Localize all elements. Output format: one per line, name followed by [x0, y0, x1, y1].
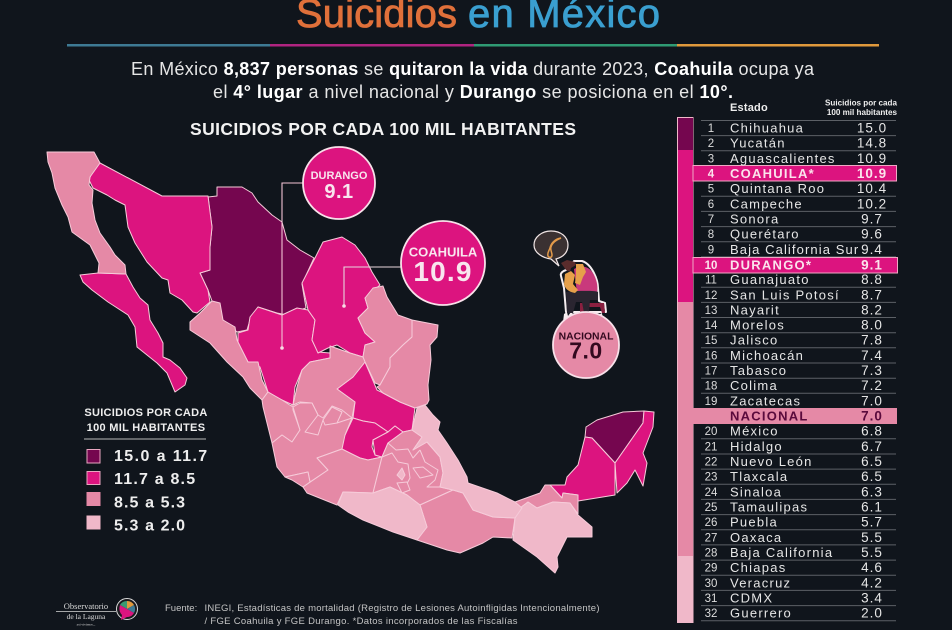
state names: Aguascalientes: [730, 151, 836, 166]
state names: Chiapas: [730, 560, 786, 575]
callout: Nacional: NACIONAL: [559, 332, 614, 342]
state names: DURANGO*: [730, 257, 812, 272]
rank numbers: 5: [708, 184, 714, 196]
legend title: SUICIDIOS POR CADA: [84, 407, 208, 419]
legend: [84, 407, 209, 534]
state names: [730, 120, 859, 621]
callout: Durango: 9.1: [324, 181, 354, 203]
source note: [165, 603, 600, 627]
values: 6.7: [861, 439, 883, 454]
state names: Nuevo León: [730, 454, 813, 469]
rank numbers: 12: [705, 290, 717, 302]
state names: San Luis Potosí: [730, 287, 840, 302]
state names: Chihuahua: [730, 120, 804, 136]
state names: Baja California Sur: [730, 242, 859, 257]
values: 7.0: [861, 408, 883, 424]
state names: México: [730, 424, 779, 439]
state names: Puebla: [730, 515, 778, 530]
leader line: Durango: [280, 183, 304, 350]
rank numbers: 20: [705, 426, 717, 438]
values: 3.4: [861, 590, 883, 606]
rank numbers: 23: [705, 472, 717, 484]
source note: Fuente:: [165, 603, 197, 614]
legend item: 5.3 a 2.0: 5.3 a 2.0: [114, 518, 186, 534]
table header: 100 mil habitantes: [827, 108, 897, 117]
icon: speech bubble with noose: [534, 231, 568, 266]
values: 6.5: [861, 454, 883, 469]
state names: Sinaloa: [730, 484, 782, 499]
values: 5.7: [861, 515, 883, 530]
icon: person with speech bubble: [534, 231, 606, 322]
rank numbers: 16: [705, 350, 717, 362]
state names: COAHUILA*: [730, 166, 815, 181]
values: 7.0: [861, 393, 883, 408]
state names: Guanajuato: [730, 272, 810, 287]
callout: Durango: DURANGO: [311, 170, 368, 182]
ranking table: [678, 98, 898, 622]
callout: Nacional: [553, 312, 619, 378]
rank numbers: 30: [705, 578, 717, 590]
values: 7.8: [861, 333, 883, 348]
rank numbers: 27: [705, 532, 717, 544]
map heading: SUICIDIOS POR CADA 100 MIL HABITANTES: [190, 119, 576, 139]
rank numbers: 31: [705, 593, 717, 605]
state names: Michoacán: [730, 348, 804, 363]
rank numbers: 2: [708, 138, 714, 150]
rank numbers: 1: [708, 123, 714, 135]
logo: Observatorio de la Laguna: así vivimos...: [77, 622, 95, 626]
values: 6.8: [861, 424, 883, 439]
choropleth map of Mexico: [47, 152, 654, 573]
rank numbers: [705, 123, 718, 620]
state names: Morelos: [730, 318, 785, 333]
highlight row: Nacional: [693, 408, 897, 424]
state names: Yucatán: [730, 136, 786, 151]
values: 15.0: [857, 120, 887, 136]
state names: Campeche: [730, 196, 803, 211]
values: 6.3: [861, 484, 883, 499]
rank numbers: 8: [708, 229, 714, 241]
values: 7.2: [861, 378, 883, 393]
values: 9.1: [861, 257, 883, 272]
state names: Baja California: [730, 545, 833, 560]
rank numbers: 18: [705, 381, 717, 393]
state names: Zacatecas: [730, 393, 801, 408]
state names: Oaxaca: [730, 530, 782, 545]
values: 9.7: [861, 212, 883, 226]
state names: NACIONAL: [730, 408, 809, 424]
values: 5.5: [861, 530, 883, 545]
legend item: 11.7 a 8.5: 11.7 a 8.5: [114, 471, 196, 488]
title divider: [67, 44, 879, 46]
rank numbers: 11: [705, 275, 717, 287]
state names: Veracruz: [730, 575, 791, 590]
rank numbers: 3: [708, 153, 714, 165]
values: 10.4: [857, 181, 887, 196]
state names: Quintana Roo: [730, 181, 825, 196]
intro text: En México 8,837 personas se quitaron la vida durante 2023, Coahuila ocupa ya: [131, 59, 815, 79]
legend item: 15.0 a 11.7: 15.0 a 11.7: [114, 448, 209, 465]
values: 14.8: [857, 136, 887, 151]
state names: Querétaro: [730, 227, 800, 242]
rank numbers: 13: [705, 305, 717, 317]
rank numbers: 32: [705, 608, 717, 620]
callout: Durango: [303, 147, 375, 219]
rank numbers: 26: [705, 517, 717, 529]
values: 6.1: [861, 500, 883, 514]
state names: Tabasco: [730, 363, 787, 378]
state names: Tamaulipas: [730, 500, 808, 514]
state names: CDMX: [730, 590, 773, 606]
state group: 11.7 a 8.5: [80, 163, 654, 501]
table header: [730, 98, 897, 117]
values: 4.2: [861, 575, 883, 590]
callout: Coahuila: [401, 221, 485, 305]
rank numbers: 7: [708, 214, 714, 226]
title: [296, 0, 660, 36]
icon: seated person: [561, 260, 606, 322]
values: 7.3: [861, 363, 883, 378]
values: 9.6: [861, 227, 883, 242]
callout: Coahuila: 10.9: [413, 256, 473, 287]
rank numbers: 28: [705, 548, 717, 560]
table header: Suicidios por cada: [825, 98, 897, 108]
values: 2.0: [861, 606, 883, 621]
intro text: el 4° lugar a nivel nacional y Durango se posiciona en el 10°.: [213, 82, 733, 102]
values: 4.6: [861, 560, 883, 575]
rank numbers: 6: [708, 199, 714, 211]
logo: Observatorio de la Laguna: Observatorio: [64, 601, 108, 611]
legend title: [84, 407, 208, 434]
source note: INEGI, Estadísticas de mortalidad (Registro de Lesiones Autoinfligidas Intencionalmente): [204, 603, 600, 614]
leader line: Coahuila: [342, 267, 401, 308]
legend title: 100 MIL HABITANTES: [87, 422, 205, 434]
logo: Observatorio de la Laguna: [56, 598, 138, 626]
rank numbers: 22: [705, 456, 717, 468]
rank numbers: 14: [705, 320, 718, 332]
values: 7.4: [861, 348, 883, 363]
values: 8.2: [861, 302, 883, 317]
state names: Colima: [730, 378, 778, 393]
values: [857, 120, 887, 621]
values: 8.0: [861, 318, 883, 333]
state names: Guerrero: [730, 606, 792, 621]
intro text: [131, 59, 815, 102]
values: 8.7: [861, 287, 883, 302]
rank numbers: 10: [705, 260, 717, 272]
highlight row: Durango: [693, 258, 898, 273]
rank numbers: 17: [705, 366, 717, 378]
rank numbers: 4: [708, 168, 715, 180]
legend item: 8.5 a 5.3: 8.5 a 5.3: [114, 494, 186, 512]
state names: Tlaxcala: [730, 469, 788, 484]
rank numbers: 15: [705, 335, 717, 347]
callout: Coahuila: COAHUILA: [409, 244, 478, 260]
values: 10.9: [857, 151, 887, 166]
state names: Jalisco: [730, 333, 778, 348]
values: 6.5: [861, 469, 883, 484]
values: 9.4: [861, 242, 883, 257]
rank numbers: 9: [708, 244, 714, 256]
state names: Nayarit: [730, 302, 780, 317]
logo: Observatorio de la Laguna: de la Laguna: [67, 612, 106, 621]
values: 10.2: [857, 196, 887, 211]
state names: Sonora: [730, 212, 779, 226]
state group: 5.3 a 2.0: [338, 405, 592, 573]
state group: 8.5 a 5.3: [47, 152, 578, 553]
rank numbers: 21: [705, 441, 717, 453]
state group: 15.0 a 11.7: [200, 187, 644, 463]
rank numbers: 19: [705, 396, 717, 408]
state names: Hidalgo: [730, 439, 783, 454]
values: 5.5: [861, 545, 883, 560]
rank numbers: 29: [705, 563, 717, 575]
rank numbers: 24: [705, 487, 718, 499]
callout: Nacional: 7.0: [569, 338, 603, 364]
rank numbers: 25: [705, 502, 717, 514]
range colour bar: [678, 118, 693, 622]
values: 8.8: [861, 272, 883, 287]
highlight row: Coahuila: [693, 166, 896, 181]
table header: Estado: [730, 102, 768, 114]
source note: / FGE Coahuila y FGE Durango. *Datos incorporados de las Fiscalías: [204, 616, 518, 627]
values: 10.9: [857, 166, 887, 181]
